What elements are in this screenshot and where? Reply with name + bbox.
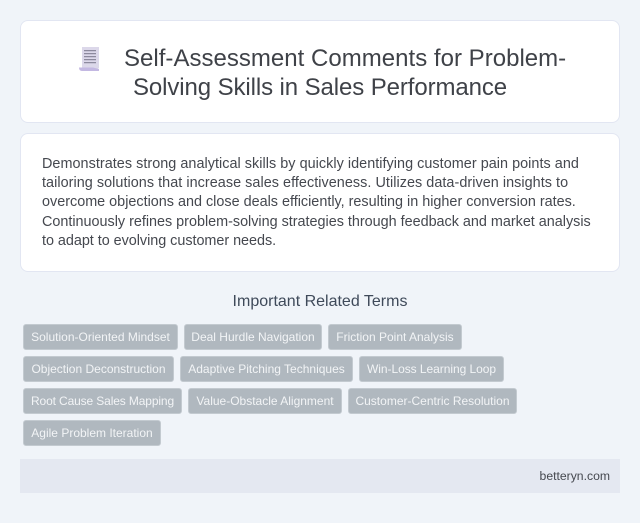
- description text: overcome objections and close deals efficiently, resulting in higher conversion rates.: [42, 194, 576, 210]
- footer source: betteryn.com: [540, 469, 610, 483]
- icon: document scroll: [79, 47, 99, 71]
- description text: tailoring solutions that increase sales effectiveness. Utilizes data-driven insights to: [42, 174, 568, 190]
- term tags: Friction Point Analysis: [336, 330, 454, 344]
- term tags: Adaptive Pitching Techniques: [188, 362, 345, 376]
- description card: [20, 133, 620, 272]
- term tags: [23, 324, 517, 446]
- description text: to adapt to evolving customer needs.: [42, 233, 276, 249]
- term tags: Agile Problem Iteration: [31, 426, 153, 440]
- term tags: Deal Hurdle Navigation: [191, 330, 315, 344]
- description text: [42, 156, 591, 249]
- title: Self-Assessment Comments for Problem-: [124, 45, 566, 72]
- header card: [20, 20, 620, 123]
- heading: important related terms: Important Related Terms: [233, 293, 407, 310]
- term tags: Solution-Oriented Mindset: [31, 330, 170, 344]
- term tags: Value-Obstacle Alignment: [196, 394, 334, 408]
- title: [124, 45, 566, 101]
- term tags: Root Cause Sales Mapping: [31, 394, 174, 408]
- footer bar: [20, 459, 620, 493]
- description text: Continuously refines problem-solving strategies through feedback and market analysis: [42, 214, 591, 230]
- term tags: Objection Deconstruction: [31, 362, 166, 376]
- term tags: Win-Loss Learning Loop: [367, 362, 496, 376]
- description text: Demonstrates strong analytical skills by quickly identifying customer pain points and: [42, 156, 579, 172]
- term tags: Customer-Centric Resolution: [355, 394, 510, 408]
- title: Solving Skills in Sales Performance: [133, 74, 507, 101]
